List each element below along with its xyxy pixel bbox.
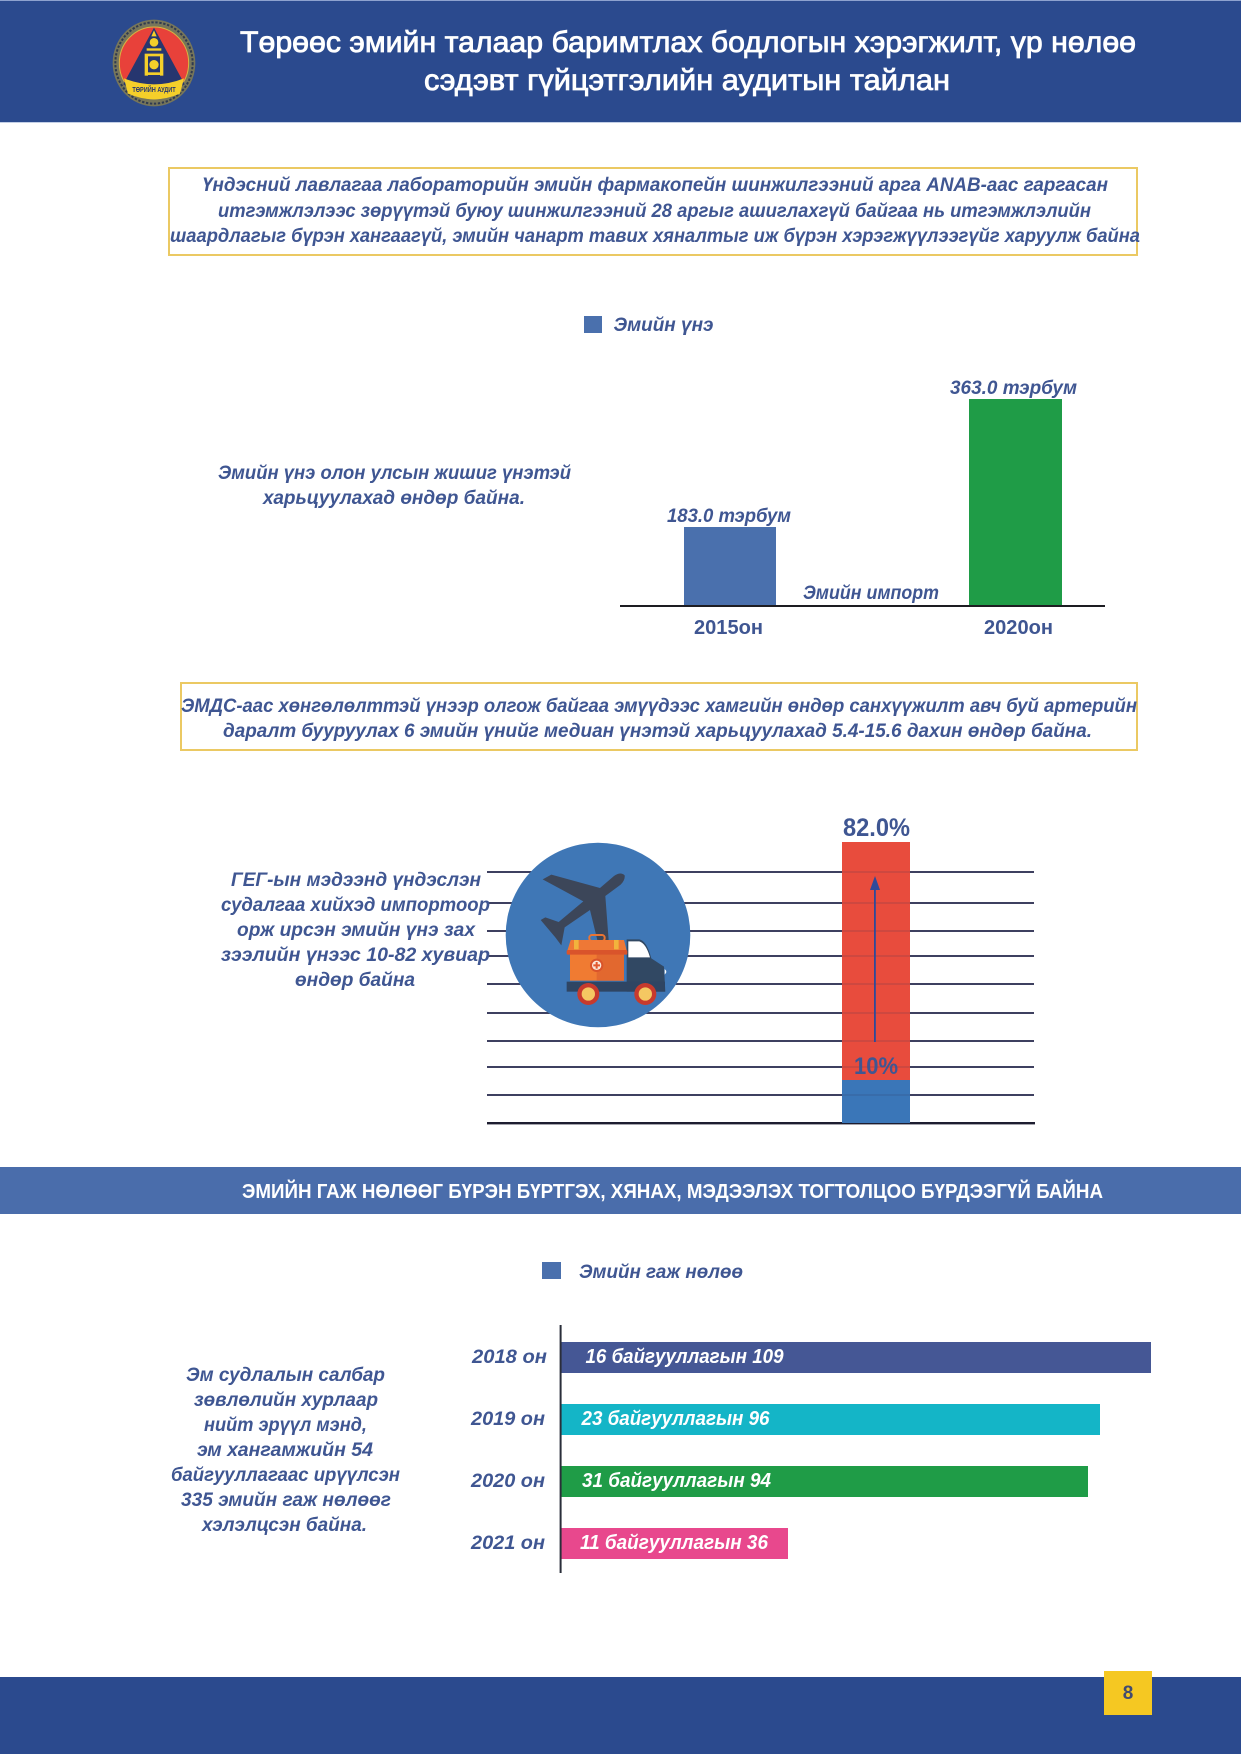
title: Төрөөс эмийн талаар баримтлах бодлогын хэрэгжилт, үр нөлөө [240,26,1136,59]
text: adverse effects note: байгууллагаас ирүүлсэн [171,1465,401,1486]
bar: 2020: 31 байгууллагын 94 [582,1470,771,1492]
text: customs data note [221,870,490,991]
bar: 2020: 2020он [984,617,1053,639]
header band [0,0,1241,123]
section heading band [0,1167,1241,1214]
text: adverse effects note: Эм судлалын салбар [186,1365,385,1386]
wheels [577,983,599,1005]
label: 82 percent: 82.0% [843,814,910,842]
legend: adverse effects: Эмийн гаж нөлөө [579,1262,743,1283]
logo: state audit emblem [113,20,195,106]
label: medicine import: Эмийн импорт [803,583,939,604]
text: adverse effects note: 335 эмийн гаж нөлөөг [181,1490,391,1511]
text: customs data note: зээлийн үнээс 10-82 хувиар [221,945,490,966]
legend: medicine price: Эмийн үнэ [614,315,714,336]
bar: 2015: 183.0 тэрбум [667,506,791,527]
bar: 2020 [470,1466,1088,1497]
callout: laboratory accreditation: итгэмжлэлээс зөрүүтэй буюу шинжилгээний 28 аргыг ашиглахгүй байгаа нь итгэмжлэлийн [218,201,1092,222]
text: medicine price note: харьцуулахад өндөр байна. [262,488,525,509]
bar: blue segment [842,1080,910,1123]
text: adverse effects note: хэлэлцсэн байна. [201,1515,367,1536]
bar: 2019 [470,1404,1100,1435]
bar: 2020: 363.0 тэрбум [950,378,1077,399]
logo: state audit emblem: ТӨРИЙН АУДИТ [132,85,176,94]
bar chart: adverse effects by year [470,1325,1151,1573]
bar: 2015 [667,506,791,639]
callout: EMDS subsidised medicines [181,683,1138,750]
bar: 2021: 11 байгууллагын 36 [580,1532,769,1554]
arrow [870,876,880,1042]
callout: laboratory accreditation: шаардлагыг бүрэн хангаагүй, эмийн чанарт тавих хяналтыг иж бүрэн хэрэгжүүлээгүйг харуулж байна [170,226,1140,247]
truck cab [627,939,665,992]
text: customs data note: орж ирсэн эмийн үнэ зах [237,920,476,941]
bar: 2020: 2020 он [470,1471,546,1492]
medical case [570,954,624,981]
title: сэдэвт гүйцэтгэлийн аудитын тайлан [424,64,950,97]
text: adverse effects note: эм хангамжийн 54 [197,1440,373,1461]
bar: 2018 [471,1342,1151,1373]
bar: 2021 [470,1528,788,1559]
text: medicine price note: Эмийн үнэ олон улсын жишиг үнэтэй [218,463,571,484]
bar: 2019: 2019 он [470,1409,546,1430]
bar: red segment [842,842,910,1080]
stacked bar chart: price difference 10 to 82 percent [487,814,1035,1124]
text: adverse effects note: нийт эрүүл мэнд, [204,1415,367,1436]
bar: 2018: 2018 он [471,1347,548,1368]
callout: laboratory accreditation [169,168,1140,255]
bar: 2018: 16 байгууллагын 109 [586,1346,784,1368]
text: customs data note: өндөр байна [295,970,415,991]
callout: EMDS subsidised medicines: даралт бууруулах 6 эмийн үнийг медиан үнэтэй харьцуулахад 5.4-15.6 дахин өндөр байна. [223,721,1092,742]
icon: plane and medical truck [506,843,690,1027]
page number [1104,1671,1152,1715]
footer band [0,1671,1241,1754]
callout: EMDS subsidised medicines: ЭМДС-аас хөнгөлөлттэй үнээр олгож байгаа эмүүдээс хамгийн өндөр санхүүжилт авч буй артерийн [181,696,1138,717]
text: adverse effects note: зөвлөлийн хурлаар [194,1390,378,1411]
bar chart: medicine import 2015 and 2020 [620,378,1105,639]
plane [541,873,625,945]
bar: 2015: 2015он [694,617,763,639]
text: customs data note: ГЕГ-ын мэдээнд үндэслэн [231,870,482,891]
text: medicine price note [218,463,571,509]
text: customs data note: судалгаа хийхэд импортоор [221,895,490,916]
section heading band: ЭМИЙН ГАЖ НӨЛӨӨГ БҮРЭН БҮРТГЭХ, ХЯНАХ, МЭДЭЭЛЭХ ТОГТОЛЦОО БҮРДЭЭГҮЙ БАЙНА [242,1179,1103,1203]
text: adverse effects note [171,1365,401,1536]
bar: 2020 [950,378,1077,639]
page number: 8 [1123,1683,1133,1704]
label: 10 percent: 10% [854,1053,898,1080]
bar: 2021: 2021 он [470,1533,546,1554]
bar: 2019: 23 байгууллагын 96 [581,1408,770,1430]
title [240,26,1136,97]
callout: laboratory accreditation: Үндэсний лавлагаа лабораторийн эмийн фармакопейн шинжилгээний арга ANAB-аас гаргасан [202,175,1109,196]
